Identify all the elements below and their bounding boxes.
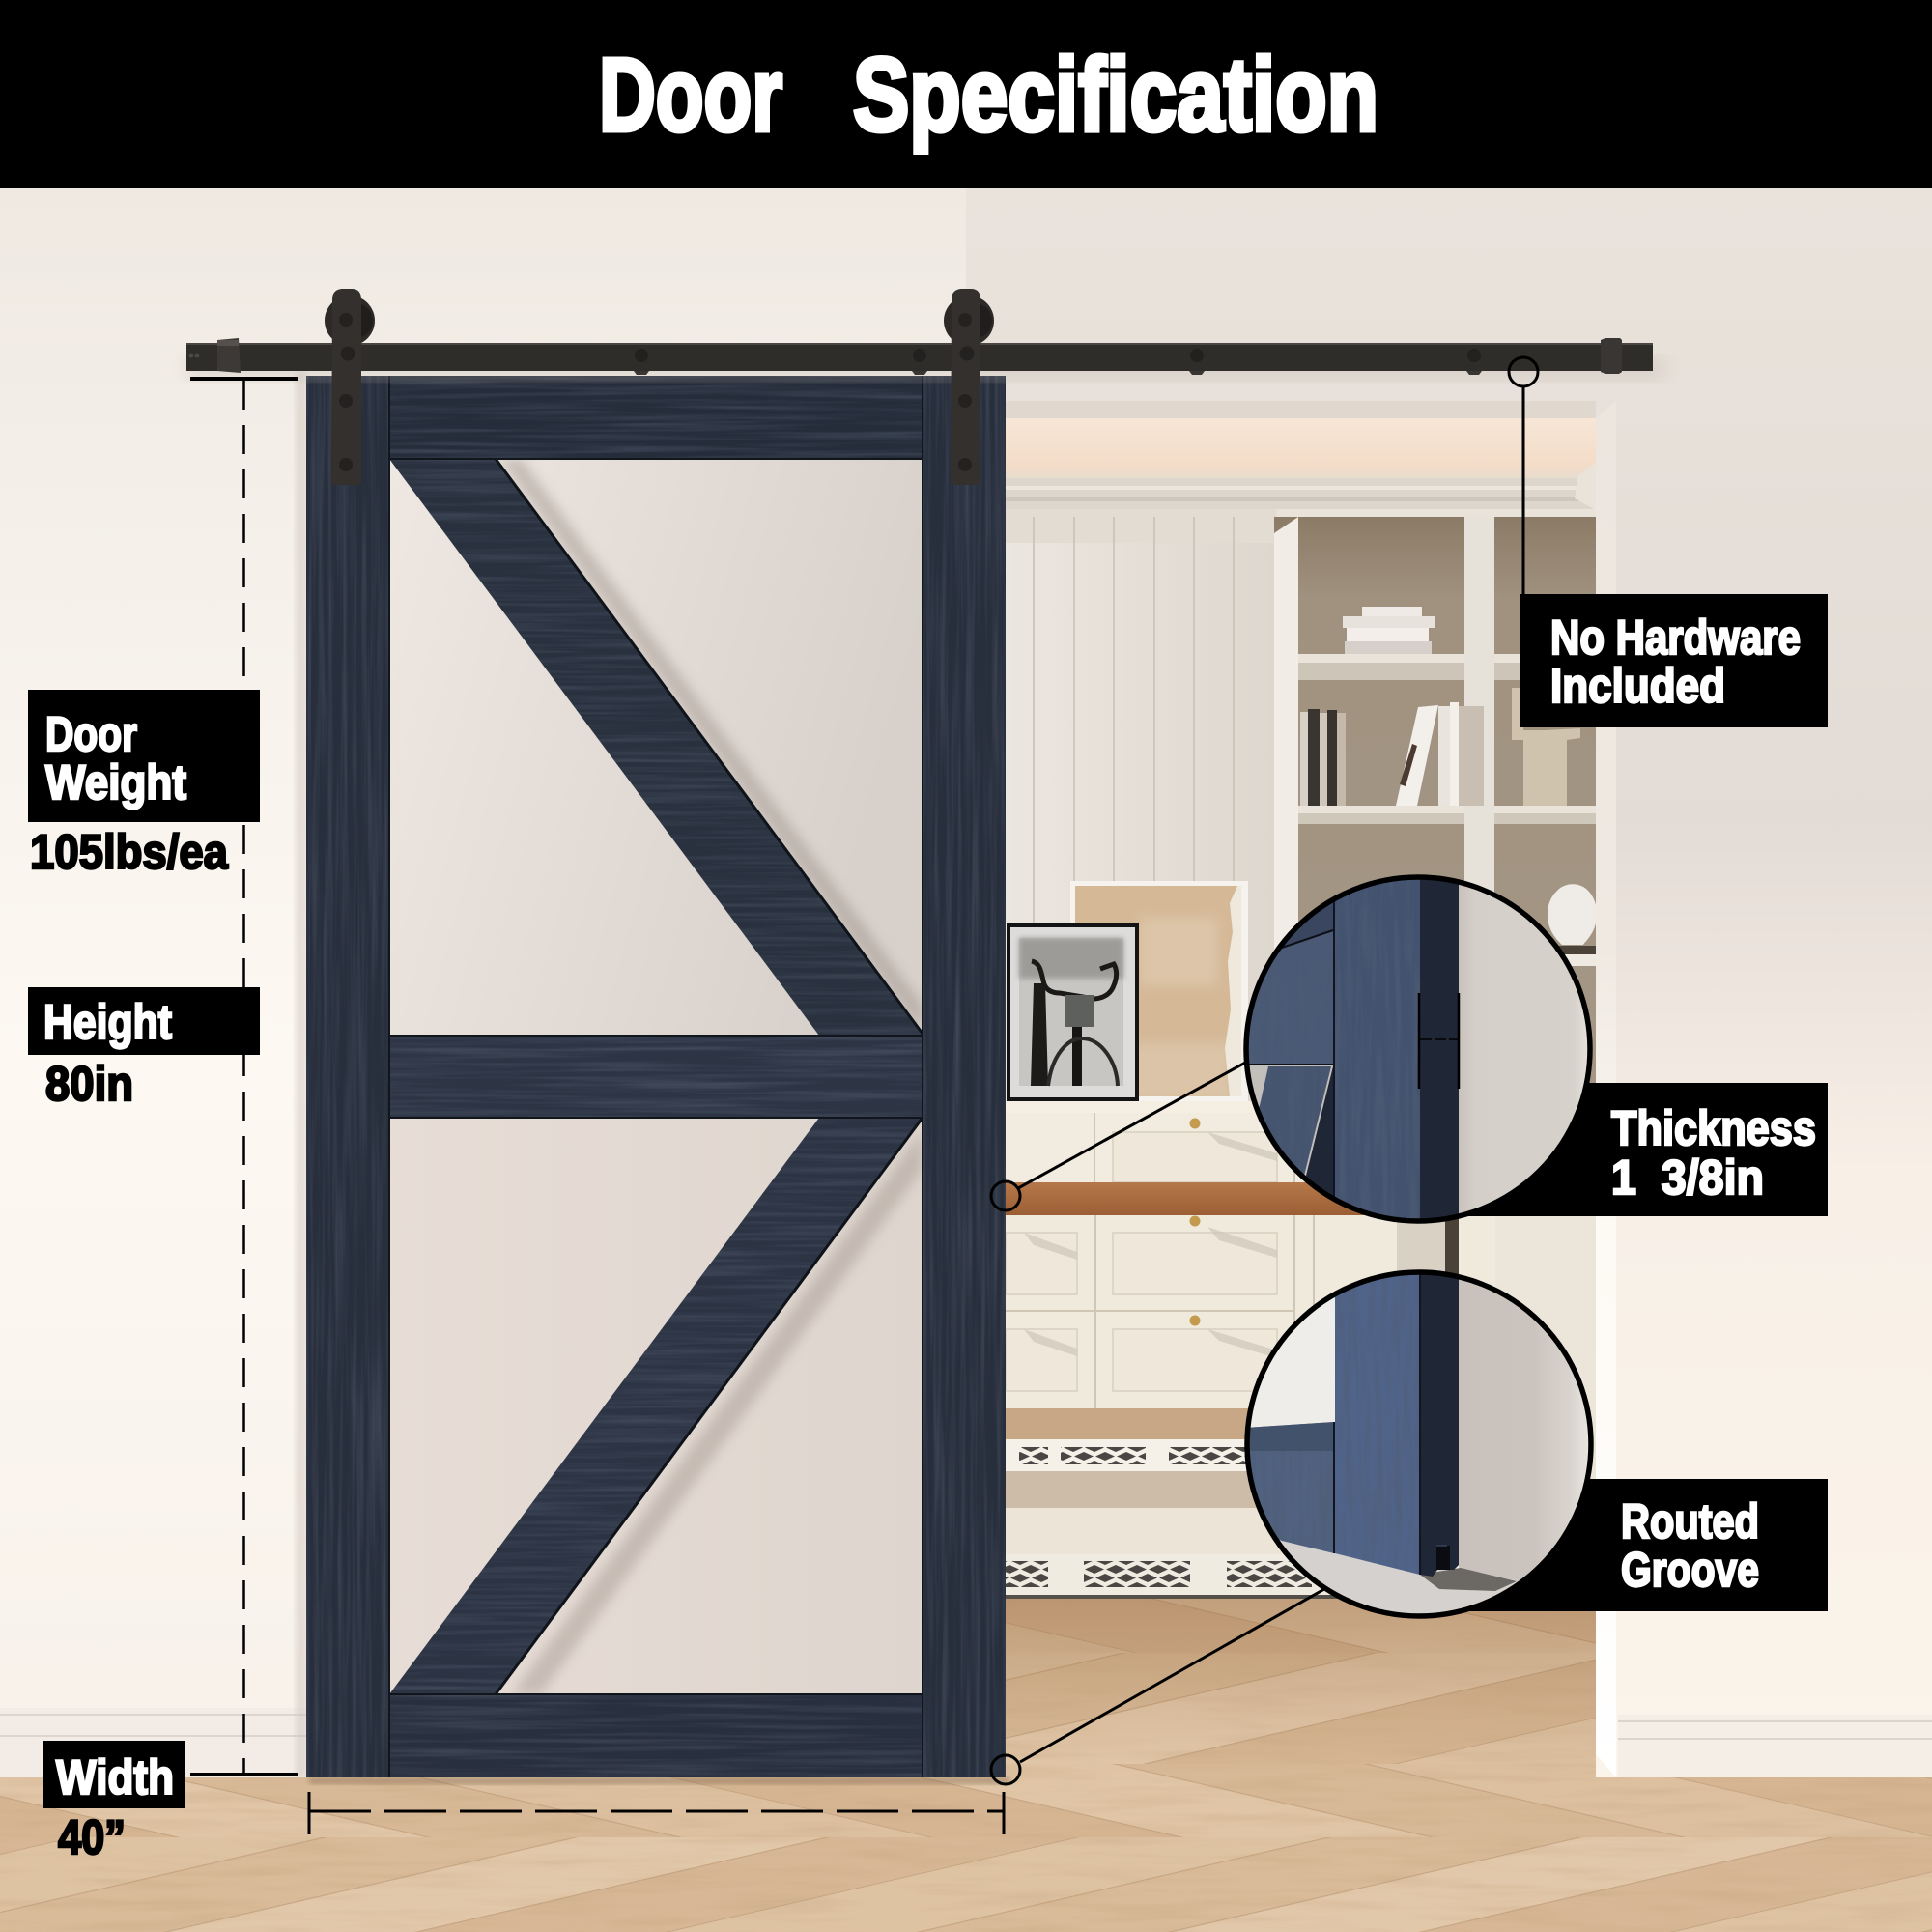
framed bicycle photo — [1007, 923, 1139, 1101]
title: Specification — [853, 36, 1378, 153]
label: width: Width — [56, 1750, 174, 1804]
floor: herringbone wood — [0, 1777, 1932, 1932]
left stile — [306, 376, 389, 1777]
callout: no hardware included: No Hardware — [1550, 611, 1801, 665]
lower diagonal brace — [389, 1118, 923, 1694]
title: Door — [599, 36, 782, 153]
crown moulding — [1006, 462, 1596, 510]
panel: sliding barn door — [306, 376, 1006, 1777]
value: height: 80in — [45, 1057, 133, 1111]
callout: thickness: Thickness — [1611, 1101, 1816, 1155]
left baseboard — [0, 1708, 309, 1777]
upper diagonal brace — [389, 459, 923, 1036]
callout: thickness — [1461, 1083, 1828, 1216]
upright books — [1300, 702, 1484, 806]
door edge with groove — [1420, 1270, 1459, 1577]
top rail — [389, 376, 923, 459]
callout: no hardware included: Included — [1550, 659, 1725, 713]
book stack — [1343, 607, 1435, 654]
sculpture — [1512, 688, 1580, 806]
wall seen through lower door opening — [389, 1118, 923, 1694]
middle rail — [389, 1036, 923, 1118]
value: width: 40” — [58, 1810, 126, 1864]
right baseboard — [1618, 1715, 1932, 1777]
callout: no hardware included — [1509, 357, 1828, 727]
label: door weight — [28, 690, 260, 822]
ceiling light band — [1006, 418, 1596, 478]
wall seen through upper door opening — [389, 459, 923, 1036]
value: door weight: 105lbs/ea — [30, 825, 229, 879]
label: height — [28, 987, 260, 1055]
door shadow on floor — [309, 1777, 1009, 1784]
hanger strap: left — [325, 289, 375, 485]
vase — [1548, 884, 1597, 954]
edge of door — [1420, 877, 1459, 1225]
detail circle: routed groove close-up — [1246, 1270, 1594, 1623]
soffit — [1006, 401, 1596, 418]
width dimension line — [307, 1792, 1005, 1834]
floor strip and rug — [1006, 1408, 1392, 1599]
label: door weight: Door — [45, 707, 137, 761]
joint marks — [1419, 993, 1459, 1089]
room floor — [1006, 1599, 1596, 1777]
hanger strap: right — [944, 289, 994, 485]
callout: routed groove: Groove — [1621, 1543, 1759, 1597]
label: height: Height — [43, 995, 172, 1049]
door frame: right jamb — [1596, 401, 1616, 1777]
cabinets — [1006, 1113, 1596, 1486]
bottom rail — [389, 1694, 923, 1777]
header bar — [0, 0, 1932, 188]
callout: thickness: 1 3/8in — [1611, 1151, 1764, 1205]
right end stop — [1601, 338, 1622, 374]
door shadow on wall — [296, 372, 307, 1777]
room seen through the doorway — [1006, 401, 1597, 1777]
large beige art print — [1070, 881, 1248, 1101]
barn door track rail — [186, 338, 1664, 379]
rail bolts — [634, 349, 1482, 375]
rail face — [1246, 930, 1333, 1064]
bookcase — [1274, 517, 1597, 1113]
panelled back wall — [1006, 509, 1276, 1113]
cabinet top — [1006, 1101, 1324, 1113]
floor — [1279, 1540, 1519, 1613]
brace face — [1260, 1066, 1333, 1196]
height dimension line — [190, 377, 298, 1776]
wooden shelf — [1006, 1182, 1382, 1215]
callout: routed groove: Routed — [1621, 1494, 1759, 1548]
bottom rail — [1246, 1422, 1334, 1553]
label: door weight: Weight — [45, 755, 186, 810]
stile face — [1335, 877, 1420, 1225]
callout: routed groove — [1468, 1479, 1828, 1611]
stile face — [1335, 1270, 1420, 1575]
detail circle: door thickness close-up — [1246, 877, 1594, 1225]
right stile — [923, 376, 1006, 1777]
leader lines and target rings — [991, 1063, 1324, 1784]
title — [599, 36, 1378, 153]
floor shadow — [1420, 1568, 1517, 1591]
left end stop — [189, 338, 241, 373]
